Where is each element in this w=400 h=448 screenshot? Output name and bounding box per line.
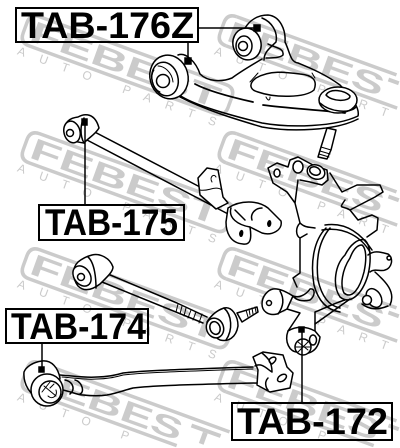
logo top right: FEBES [223, 16, 389, 103]
logo row 2 left: AUTO PARTS [16, 161, 219, 246]
part: knuckle bracket [226, 202, 281, 244]
logo row 2 right [213, 130, 399, 237]
label: TAB-175: TAB-175 [45, 202, 178, 243]
label: TAB-174: TAB-174 [11, 306, 146, 347]
leader lines and markers [39, 25, 304, 402]
logo row 3 right [213, 246, 399, 353]
logo top left: AUTO PARTS [16, 44, 219, 129]
logo row 4 right: AUTO P [213, 390, 328, 443]
logo row 3 right: AUTO PART [213, 277, 391, 353]
logo row 4 right [213, 359, 399, 447]
logo row 3 left: FEBEST [26, 249, 225, 348]
logo row 3 right: FEBES [223, 249, 389, 336]
logo top left [15, 13, 235, 131]
part: trailing rod [61, 115, 230, 215]
part: lower arm (TAB-174) [24, 352, 293, 406]
part: upper control arm [145, 15, 358, 159]
logo row 4 left: FEBES [26, 362, 187, 447]
logo row 3 left: AUTO PARTS [16, 277, 219, 362]
logo row 4 left [16, 359, 230, 447]
part: lateral rod [69, 255, 258, 340]
part: lower link (TAB-172) [262, 289, 350, 355]
logo row 2 right: AUTO PART [213, 161, 391, 237]
logo top right: AUTO PART [213, 44, 391, 120]
part: steering knuckle [268, 157, 392, 312]
logo row 4 left: AUTO P [16, 390, 131, 443]
logo top left: FEBEST [26, 16, 225, 115]
logo row 2 right: FEBES [223, 133, 389, 220]
logo row 4 right: FEBES [223, 362, 384, 447]
logo top right [213, 13, 399, 120]
logo row 2 left [15, 130, 235, 248]
label: TAB-176Z: TAB-176Z [21, 5, 194, 46]
label: TAB-172: TAB-172 [237, 401, 388, 442]
logo row 2 left: FEBEST [26, 133, 225, 232]
logo row 3 left [15, 246, 235, 364]
